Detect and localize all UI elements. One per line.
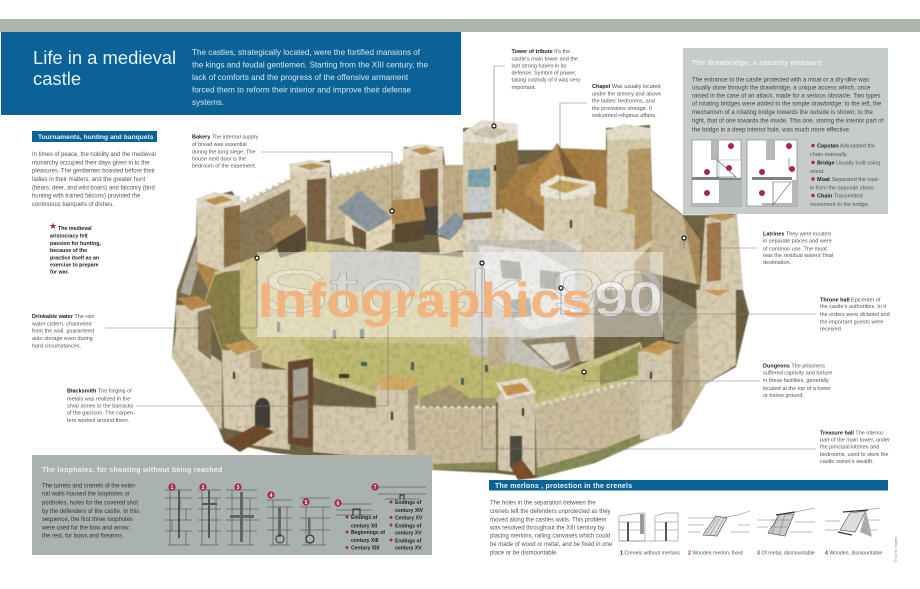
panel: loopholes xyxy=(32,455,432,555)
label: throne hall: Throne hall Epicenter of xyxy=(820,297,881,303)
drawbridge legend: wood. xyxy=(809,169,825,175)
label: tower of tribute: Tower of tribute It's the xyxy=(512,49,570,55)
diagram: loophole 7: 7 xyxy=(374,485,377,491)
intro text: lack of comforts and the progress of the offensive armament xyxy=(192,73,409,82)
merlons captions: Wooden, dismountable xyxy=(828,550,882,556)
callout: aristocracy note xyxy=(49,221,101,276)
diagram: inward bridge xyxy=(747,140,797,206)
label: tower of tribute: defense. Symbol of power, xyxy=(512,70,577,76)
panel: tournaments: monarchy occupied their days given in to the xyxy=(32,160,150,166)
label: dungeons: located at the top of a tower xyxy=(763,386,831,392)
label: throne hall: received. xyxy=(820,327,843,333)
label: tower of tribute: castle's main tower and the xyxy=(512,56,578,62)
callout: aristocracy note: because of the xyxy=(50,248,87,254)
drawbridge legend: Chain xyxy=(817,194,833,200)
panel: tournaments: hunting with trained falcons) provided the xyxy=(32,194,141,200)
drawbridge heading: The drawbridge, a security measure xyxy=(692,58,821,67)
loopholes text: were used for the bow and arrow; xyxy=(41,525,130,531)
intro text: forced them to reform their interior and improve their defense xyxy=(192,86,412,94)
keep and chapel block xyxy=(463,138,518,260)
diagram: loophole 3: 3 xyxy=(237,485,240,491)
loopholes legend left xyxy=(346,515,385,552)
merlons heading: The merlons , protection in the crenels xyxy=(495,483,632,490)
diagram: loophole 2 xyxy=(198,483,221,545)
loopholes legend right: Endings of xyxy=(395,538,422,544)
top grey band xyxy=(0,19,920,32)
diagram: metal merlon xyxy=(757,508,815,536)
merlons text: The holes in the separation between the xyxy=(490,501,596,507)
drawbridge legend: Moat xyxy=(817,177,830,183)
loopholes legend right: century XV xyxy=(395,531,422,537)
merlons text: place or be dismountable. xyxy=(490,550,558,556)
panel: tournaments: (bears, deer, and wild boars) and falconry (bird xyxy=(32,185,155,191)
loopholes legend left: Century XIII xyxy=(351,546,380,552)
label: dungeons: or below ground. xyxy=(763,393,804,399)
label: chapel: the provisions storage. It xyxy=(592,106,652,112)
drawbridge legend: Articulated the xyxy=(839,144,875,150)
diagram: loophole 7 xyxy=(371,483,426,499)
label: bakery: Bakery The internal supply xyxy=(192,135,258,141)
diagram: loophole 5 xyxy=(300,498,330,545)
diagram: loophole 3 xyxy=(226,483,259,545)
label: treasure hall: bedrooms, used to store the xyxy=(820,452,888,458)
loopholes legend right: Century XV xyxy=(395,516,423,522)
label: chapel: the ladies' bedrooms, and xyxy=(592,99,655,105)
label: blacksmith: ters worked around them. xyxy=(67,418,130,424)
loopholes text: portholes, holes for the covered shot xyxy=(42,500,138,506)
merlons text: crenels left the defenders unprotected as they xyxy=(490,509,611,515)
intro text: The castles, strategically located, were the fortified mansions of xyxy=(192,48,421,57)
loopholes legend left: Beginnings of xyxy=(351,530,385,536)
watermark: outlined number: 90 xyxy=(594,273,663,327)
panel: tournaments: Tournaments, hunting and banquets xyxy=(38,134,154,141)
loopholes text: by the defenders of the castle. In this xyxy=(42,509,139,515)
merlons captions: 3 xyxy=(757,550,760,556)
label: bakery: house next door is the xyxy=(192,156,246,162)
drawbridge legend: le from the opposite shore. xyxy=(810,186,876,192)
label: latrines: Latrines They were located xyxy=(763,231,831,237)
label: drinkable water: water cistern, channeled xyxy=(31,322,92,328)
intro text: systems. xyxy=(192,98,224,107)
merlons text: was resolved throughout the XIII century by xyxy=(489,525,604,531)
loopholes heading: The loopholes, for shooting without being reached xyxy=(42,467,222,474)
loopholes text: The turrets and crenels of the exter- xyxy=(42,484,136,490)
label: blacksmith: metals was realized in the xyxy=(67,396,130,402)
loopholes legend left: century XII xyxy=(351,524,378,530)
panel: tournaments: continuous banquets of dishes. xyxy=(32,202,114,208)
back walls xyxy=(240,182,290,268)
drawbridge text: of rotating bridges were added to the simple drawbridge: to the left, the xyxy=(692,102,882,108)
leader lines and dots xyxy=(105,66,816,449)
diagram: loophole 1 xyxy=(165,483,192,545)
drawbridge legend: chain manually. xyxy=(810,152,848,158)
callout: aristocracy note: for war. xyxy=(50,270,69,276)
tiny soldiers, horse and arrow slits xyxy=(277,322,488,385)
diagram: loophole 1: 1 xyxy=(171,485,174,491)
label: latrines: in separate places and were xyxy=(763,239,832,245)
panel: merlons xyxy=(489,480,888,556)
drawbridge legend xyxy=(809,144,880,208)
label: chapel: welcomed religious affairs. xyxy=(591,113,657,119)
header panel xyxy=(1,32,461,115)
loopholes text: sequence, the first three loopholes xyxy=(42,517,133,523)
label: latrines: was the residual waters' final xyxy=(762,253,833,259)
label: tower of tribute: taking custody of it was very xyxy=(512,77,581,83)
loopholes legend left: century XIII xyxy=(351,538,379,544)
drawbridge legend: Transmitted xyxy=(832,194,863,200)
merlons captions: Of metal, dismountable xyxy=(760,550,815,556)
label: treasure hall: part of the main tower, under xyxy=(820,438,890,444)
loopholes legend right: century XIV xyxy=(395,508,424,514)
drawbridge text: usually done through the drawbridge, a unique access which, once xyxy=(692,86,871,92)
diagram: loophole 6 xyxy=(334,499,372,515)
merlons captions: 2 xyxy=(688,550,691,556)
label: tower of tribute: last strong haven in its xyxy=(512,63,566,69)
callout: aristocracy note: aristocracy felt xyxy=(50,234,88,240)
label: latrines: of common use. The moat xyxy=(763,246,827,252)
callout: aristocracy note: passion for hunting, xyxy=(50,241,101,247)
loopholes legend right: century XV xyxy=(395,546,422,552)
merlons captions: 1 xyxy=(620,550,623,556)
front-left wall and towers xyxy=(172,330,222,430)
watermark: orange text: Infographics xyxy=(258,274,592,328)
label: drinkable water: hard circumstances. xyxy=(32,343,82,349)
drawbridge legend: Bridge xyxy=(817,161,834,167)
label: latrines: destination. xyxy=(763,260,792,266)
label: treasure hall: the principal kitchen and xyxy=(820,445,879,451)
drawbridge text: mechanism of a rotating bridge towards the outside is shown; to the xyxy=(692,110,873,116)
label: bakery: during the long siege. The xyxy=(192,149,256,155)
copyright note: © Sol 90 Images xyxy=(894,537,898,562)
label: throne hall: the orders were dictated and xyxy=(820,312,890,318)
label: treasure hall: Treasure hall The interior xyxy=(820,430,883,436)
courtyard xyxy=(205,240,655,407)
diagram: fixed wooden merlon xyxy=(688,511,750,536)
merlons text: moved along the castles walls. This problem xyxy=(490,517,606,523)
panel: drawbridge xyxy=(683,48,888,214)
drawbridge text: right, that of one towards the inside. This one, storing the interior part of xyxy=(692,119,883,125)
panel: tournaments: ladies in their matters, and the greater hunt xyxy=(32,177,146,183)
drawbridge text: the bridge in a deep interior hole, was much more effective. xyxy=(692,127,851,133)
front-right wall and towers xyxy=(535,377,655,476)
illustration: cutaway castle xyxy=(172,120,749,480)
label: drinkable water: Drinkable water The rain xyxy=(32,314,95,320)
drawbridge text: The entrance to the castle protected with a moat or a dry-dike was xyxy=(692,77,869,83)
panel: tournaments: In times of peace, the nobility and the medieval xyxy=(32,152,156,158)
panel: tournaments xyxy=(32,131,157,208)
loopholes text: the rest, for bows and firearms. xyxy=(42,534,124,540)
drawbridge legend: Usually built using xyxy=(834,161,880,167)
diagram: crenel without merlons xyxy=(619,513,678,541)
label: chapel: Chapel Was usually located xyxy=(592,84,661,90)
diagram: loophole 4: 4 xyxy=(270,493,273,499)
towers, back row xyxy=(197,197,240,272)
label: blacksmith: shop annex to the barracks xyxy=(67,403,134,409)
watermark: translucent panel xyxy=(257,252,663,337)
label: tower of tribute: important. xyxy=(512,85,536,91)
diagram: outward bridge xyxy=(692,140,741,206)
merlons captions: 4 xyxy=(825,550,828,556)
loopholes legend right: Endings of xyxy=(395,500,422,506)
diagram: loophole 6: 6 xyxy=(337,501,340,507)
callout: aristocracy note: The medieval xyxy=(58,226,92,232)
label: dungeons: suffered captivity and torture xyxy=(763,371,832,377)
callout: aristocracy note: practice itself as an xyxy=(50,255,99,261)
label: throne hall: the castle's authorities. In it xyxy=(820,304,887,310)
merlons captions: Wooden merlon, fixed xyxy=(691,550,743,556)
drawbridge legend: movement to the bridge. xyxy=(810,202,870,208)
label: blacksmith: Blacksmith The forging of xyxy=(67,389,132,395)
label: dungeons: in these facilities, generally xyxy=(763,378,829,384)
merlons captions: Crenels without merlons xyxy=(623,550,680,556)
drawbridge legend: Capstan xyxy=(817,144,839,150)
diagram: dismountable wooden merlon xyxy=(825,508,880,537)
drawbridge text: raised in the case of an attack, made for a serious obstacle. Two types xyxy=(692,94,880,100)
label: chapel: under the armory and above xyxy=(592,91,661,97)
panel: tournaments: pleasures. The gentlemen boasted before their xyxy=(32,169,155,175)
callout: aristocracy note: ★ xyxy=(49,221,57,231)
title: castle xyxy=(33,68,81,89)
label: blacksmith: of the garrison. The carpen- xyxy=(67,411,135,417)
watermark: ghost outline text: Stock 90 xyxy=(260,258,665,325)
diagram: loophole 2: 2 xyxy=(202,485,205,491)
label: bakery: of bread was essential xyxy=(192,142,247,148)
loopholes legend left: Endings of xyxy=(351,515,378,521)
title: Life in a medieval xyxy=(33,47,176,68)
loopholes text: nal walls housed the loopholes or xyxy=(42,492,130,498)
label: treasure hall: castle owner's wealth. xyxy=(820,459,874,465)
callout: aristocracy note: exercise to prepare xyxy=(50,262,99,268)
label: bakery: bedroom of the easement. xyxy=(192,164,257,170)
diagram: loophole 4 xyxy=(267,491,292,545)
label: throne hall: the important guests were xyxy=(820,320,883,326)
loopholes legend right: Endings of xyxy=(395,523,422,529)
label: drinkable water: auto storage even during xyxy=(32,336,93,342)
buildings xyxy=(268,214,306,244)
loopholes legend right xyxy=(390,500,424,552)
label: drinkable water: from the wall, guaranteed xyxy=(32,329,94,335)
label: dungeons: Dungeons The prisoners xyxy=(763,364,825,370)
drawbridge legend: Separated the cast- xyxy=(830,177,880,183)
merlons text: placing merlons, railing canvases which could xyxy=(490,534,610,540)
diagram: loophole 5: 5 xyxy=(305,500,308,506)
intro text: the kings and feudal gentlemen. Starting from the XIII century, the xyxy=(192,60,429,70)
merlons text: be made of wood or metal, and be fixed in one xyxy=(490,542,613,548)
